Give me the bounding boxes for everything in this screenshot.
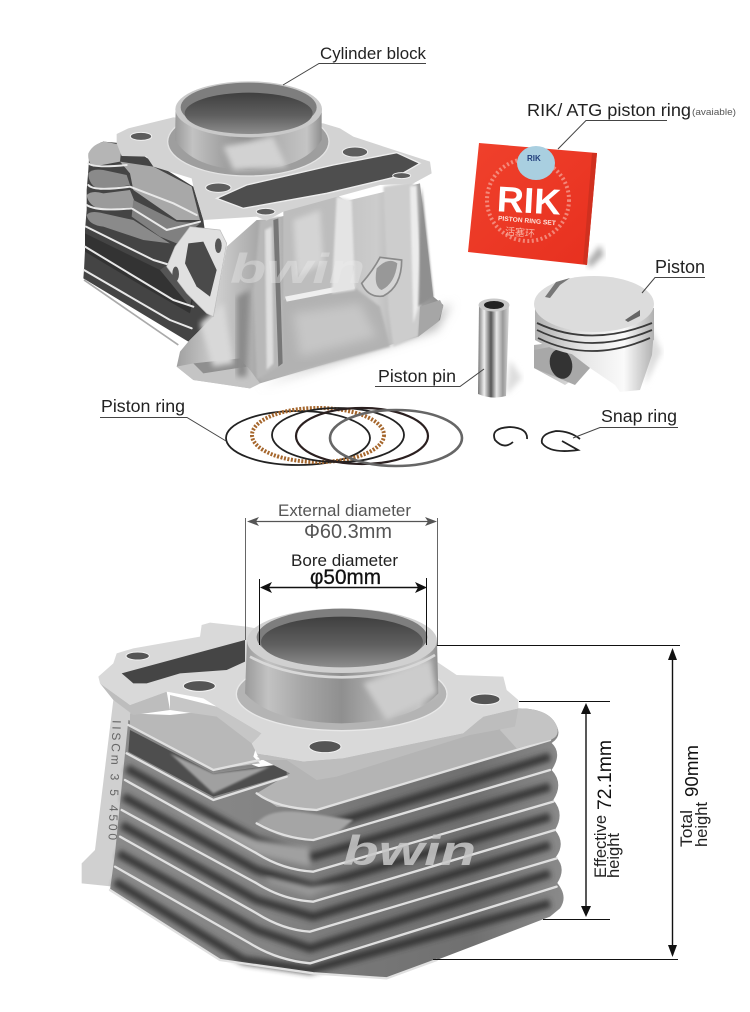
side wall bbox=[82, 700, 132, 887]
watermark: bottom: bwin bbox=[343, 827, 476, 874]
dimension: external diameter: Φ60.3mm bbox=[304, 521, 392, 543]
dimension: effective height: Effective bbox=[592, 815, 610, 878]
piston pin bbox=[478, 298, 522, 398]
deck thickness edge bbox=[100, 683, 518, 780]
fin tip right bbox=[500, 708, 558, 748]
dimension: bore diameter bbox=[260, 551, 427, 645]
cast markings: IISCm 3 5 4500 bbox=[105, 720, 124, 841]
transfer slot bbox=[217, 153, 420, 208]
ring of small text bbox=[487, 159, 569, 241]
snap rings bbox=[494, 427, 580, 451]
dimension: external diameter: External diameter bbox=[278, 501, 411, 520]
label: cylinder block bbox=[283, 45, 427, 85]
ground shadow bbox=[260, 303, 452, 387]
label: RIK ATG piston ring bbox=[527, 100, 736, 149]
transfer slot bbox=[122, 640, 245, 683]
piston rings bbox=[226, 408, 462, 466]
piston bbox=[534, 276, 662, 392]
recessed panel lower bbox=[257, 287, 390, 382]
watermark: top: bwin bbox=[230, 245, 365, 292]
RIK logo: RIK bbox=[496, 178, 562, 223]
recessed panel upper bbox=[283, 195, 353, 300]
cylinder collar bbox=[168, 107, 329, 176]
column left bbox=[253, 217, 283, 380]
dimension: total height: 90mm bbox=[681, 745, 702, 797]
piston ring box: 活塞环 bbox=[504, 225, 535, 240]
crown side with grooves bbox=[535, 308, 654, 356]
bolt holes bbox=[130, 132, 411, 215]
dimension: external diameter bbox=[246, 501, 438, 645]
crown top bbox=[534, 276, 654, 332]
center rib bbox=[332, 197, 355, 293]
label: piston pin: Piston pin bbox=[378, 366, 456, 386]
dimension: effective height bbox=[519, 702, 623, 920]
dimension: total height bbox=[433, 646, 711, 960]
dimension: total height: Total bbox=[678, 810, 696, 847]
front and side faces bbox=[177, 183, 443, 388]
bolt holes bbox=[126, 652, 500, 753]
cylinder collar bbox=[236, 657, 447, 731]
dimension: effective height: height bbox=[605, 833, 623, 878]
dimension: bore diameter: φ50mm bbox=[310, 566, 381, 589]
box front bbox=[468, 143, 597, 265]
notch boss bbox=[362, 257, 402, 296]
label: piston pin bbox=[375, 366, 484, 386]
photo: bottom cylinder bbox=[82, 608, 564, 978]
fin edges bbox=[110, 725, 557, 978]
label: snap ring: Snap ring bbox=[601, 406, 677, 426]
dark gap shadows under fin edges bbox=[115, 757, 550, 970]
piston ring box: RIK bbox=[527, 154, 541, 163]
box side edge bbox=[583, 153, 597, 265]
column right bbox=[383, 182, 422, 347]
skirt bbox=[534, 330, 654, 392]
deck surface bbox=[117, 117, 432, 221]
label: piston bbox=[642, 257, 705, 293]
hologram seal bbox=[517, 146, 555, 180]
dimension: total height: height bbox=[693, 802, 711, 847]
intake flange bbox=[167, 227, 227, 317]
upper fin lobes bbox=[88, 142, 122, 167]
buttress streaks bbox=[200, 303, 233, 367]
base foot bbox=[177, 358, 260, 388]
cooling fins bbox=[83, 142, 217, 345]
dimension: bore diameter: Bore diameter bbox=[291, 551, 398, 570]
label: RIK ATG piston ring: (avaiable) bbox=[692, 107, 736, 118]
piston ring box bbox=[468, 143, 604, 268]
light casting patches bbox=[130, 710, 260, 770]
label: RIK ATG piston ring: RIK/ ATG piston ring bbox=[527, 100, 691, 120]
piston ring box: PISTON RING SET bbox=[498, 215, 556, 227]
label: piston: Piston bbox=[655, 257, 705, 277]
label: piston ring bbox=[100, 396, 226, 441]
deck surface bbox=[98, 623, 518, 762]
dimension: effective height: 72.1mm bbox=[594, 740, 616, 810]
label: piston ring: Piston ring bbox=[101, 396, 185, 416]
photo: top cylinder block bbox=[83, 81, 452, 388]
label: cylinder block: Cylinder block bbox=[320, 45, 427, 63]
fin body bbox=[110, 708, 564, 978]
label: snap ring bbox=[573, 406, 678, 438]
